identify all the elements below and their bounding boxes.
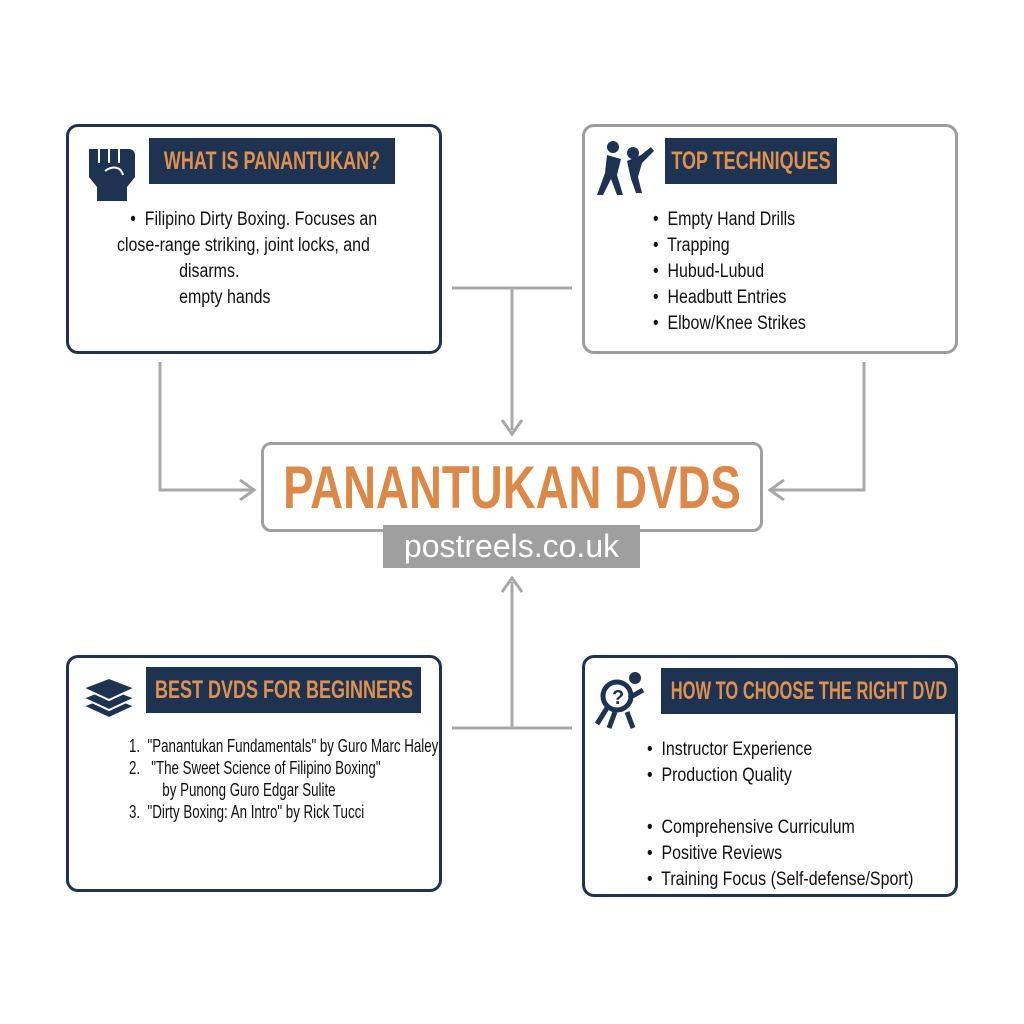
heading bbox=[665, 138, 837, 184]
list: • Positive Reviews bbox=[647, 843, 782, 864]
url label: postreels.co.uk bbox=[404, 528, 619, 564]
list: • Empty Hand Drills bbox=[653, 209, 795, 230]
center title block bbox=[261, 442, 763, 568]
list: • Elbow/Knee Strikes bbox=[653, 313, 806, 334]
list: • Instructor Experience bbox=[647, 739, 812, 760]
panel: how to choose bbox=[582, 655, 958, 897]
list: 2. "The Sweet Science of Filipino Boxing" bbox=[129, 758, 381, 778]
list: • Trapping bbox=[653, 235, 730, 256]
list: • Hubud-Lubud bbox=[653, 261, 764, 282]
title bbox=[261, 442, 763, 532]
heading: WHAT IS PANANTUKAN? bbox=[164, 147, 380, 175]
heading: HOW TO CHOOSE THE RIGHT DVD bbox=[671, 677, 947, 705]
text block: close-range striking, joint locks, and bbox=[117, 235, 370, 256]
list: • Headbutt Entries bbox=[653, 287, 786, 308]
icon: fighters bbox=[597, 141, 654, 195]
icon: fist bbox=[89, 149, 135, 201]
icon: magnifier runner: ? bbox=[612, 687, 624, 709]
heading bbox=[146, 667, 421, 713]
icon: dvd stack bbox=[86, 679, 132, 717]
icon: magnifier runner bbox=[594, 672, 644, 729]
heading: BEST DVDS FOR BEGINNERS bbox=[154, 676, 413, 704]
heading bbox=[149, 138, 395, 184]
heading: TOP TECHNIQUES bbox=[671, 147, 831, 175]
panel: top techniques bbox=[582, 124, 958, 354]
list: • Training Focus (Self-defense/Sport) bbox=[647, 869, 913, 890]
text block: empty hands bbox=[179, 287, 270, 308]
list: 1. "Panantukan Fundamentals" by Guro Marc Haley bbox=[129, 736, 438, 756]
panel: best dvds bbox=[66, 655, 442, 892]
heading bbox=[661, 668, 957, 714]
text block bbox=[117, 209, 377, 308]
list: by Punong Guro Edgar Sulite bbox=[162, 780, 336, 800]
list: • Comprehensive Curriculum bbox=[647, 817, 855, 838]
text block: • Filipino Dirty Boxing. Focuses an bbox=[130, 209, 377, 230]
list: 3. "Dirty Boxing: An Intro" by Rick Tucci bbox=[129, 802, 364, 822]
title: PANANTUKAN DVDS bbox=[283, 454, 741, 521]
list: • Production Quality bbox=[647, 765, 792, 786]
text block: disarms. bbox=[179, 261, 239, 282]
list bbox=[647, 739, 913, 890]
list bbox=[129, 736, 438, 822]
panel: what is panantukan bbox=[66, 124, 442, 354]
list bbox=[653, 209, 806, 334]
